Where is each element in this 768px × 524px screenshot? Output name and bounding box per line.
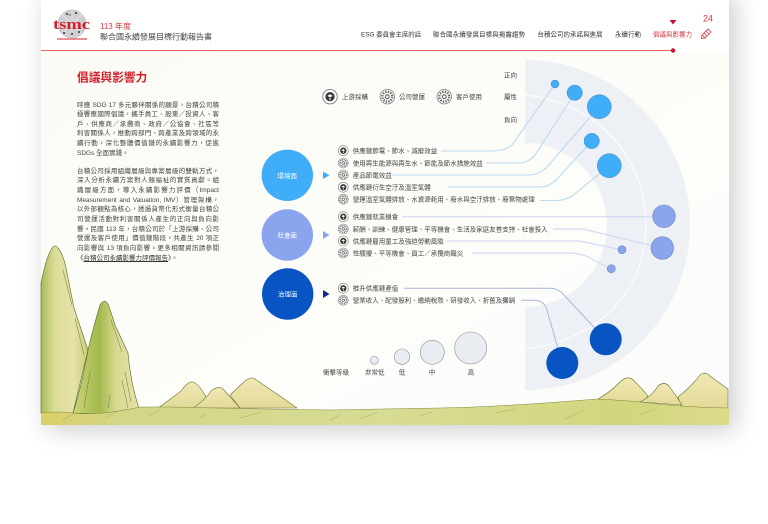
body text: 戶、供應商／承攬商、政府／公協會、社區等 [77, 121, 219, 128]
body text: 深入分析永續方案對人類福祉的實質貢獻。組 [77, 177, 219, 184]
list: environment impacts: 營運溫室氣體排放、水資源耗用、廢水與空汙排放、廢棄物處理 [353, 195, 535, 204]
list: society impacts [338, 212, 548, 258]
body text: 利害關係人，推動跨部門、跨產業及跨領域的永 [77, 130, 219, 137]
legend: impact level: 低 [399, 368, 406, 376]
axis labels: 正向 [504, 70, 517, 80]
body text: Measurement and Valuation, IMV）管理架構， [77, 197, 219, 204]
content background [41, 51, 729, 425]
list: governance impacts [338, 283, 516, 305]
list: environment impacts: 供應鏈衍生空汙及溫室氣體 [353, 183, 431, 192]
active nav marker [670, 20, 676, 24]
navigation: 台積公司的承諾與進展 [538, 30, 603, 38]
bubbles: environment [551, 80, 621, 178]
legend: impact level: 衝擊等級 [323, 368, 350, 376]
page card background [41, 0, 729, 425]
list: society impacts: 供應鏈雇用童工及強迫勞動風險 [353, 236, 444, 245]
legend: impact level: 非常低 [365, 368, 385, 376]
category: governance [262, 268, 330, 320]
value chain icons row: 公司營運 [399, 92, 426, 101]
connector lines: environment [392, 84, 609, 200]
illustration: grassy ground [41, 399, 729, 425]
logo: tsmc [53, 10, 90, 39]
report title: 聯合國永續發展目標行動報告書 [100, 32, 212, 42]
body text: 向影響與 13 項負向影響。更多相關資訊請參閱 [77, 245, 219, 252]
list: environment impacts: 使用再生能源與再生水、節能及節水措施效益 [353, 158, 483, 167]
illustration: grass strokes [62, 409, 655, 420]
bubbles: governance [546, 323, 622, 379]
body text: 台積公司採用組織層級與專案層級的雙軌方式， [77, 168, 219, 175]
connector lines: society [402, 217, 664, 269]
report title: 113 年度 [100, 21, 131, 31]
header rule [41, 48, 675, 53]
body text: 《台積公司永續影響力評價報告》。 [77, 255, 178, 262]
list: governance impacts: 推升供應鏈產值 [353, 284, 399, 293]
list: society impacts: 性騷擾、平等機會、員工／承攬商職災 [353, 248, 464, 257]
body text: 響。民國 113 年，台積公司於「上游採購、公司 [77, 226, 219, 233]
arc band [525, 60, 690, 390]
value chain icons row: 客戶使用 [456, 92, 482, 101]
navigation: 永續行動 [615, 30, 641, 38]
body text: 極響應國際倡議，攜手員工、股東／投資人、客 [77, 111, 219, 118]
axis labels: 屬性 [504, 92, 518, 101]
illustration: small mountains right [598, 373, 728, 410]
report title [100, 21, 212, 42]
illustration: tall mountains [41, 246, 139, 414]
legend: impact level [323, 332, 487, 376]
body text: 司營運活動對利害關係人產生的正向與負向影 [77, 216, 219, 223]
body text: SDGs 全面實踐。 [77, 150, 129, 157]
navigation: 倡議與影響力 [653, 30, 692, 38]
category: environment [262, 150, 330, 201]
list: society impacts: 供應鏈就業機會 [353, 212, 399, 221]
body text: 續行動，深化整體價值鏈的永續影響力，促進 [77, 140, 219, 147]
icon: pencil [702, 29, 711, 38]
illustration: small mountains left [158, 378, 297, 408]
body text [77, 101, 219, 262]
value chain icons row: 上游採購 [342, 92, 368, 101]
axis labels: 負向 [504, 115, 517, 124]
navigation [361, 30, 692, 38]
category: society [262, 209, 330, 261]
list: environment impacts: 供應鏈節電、節水、減廢效益 [353, 146, 438, 155]
bubbles: society [607, 205, 675, 273]
logo: tsmc: tsmc [53, 17, 90, 33]
body text: 呼應 SDG 17 多元夥伴關係的願景，台積公司積 [77, 102, 219, 108]
legend: impact level: 中 [429, 368, 435, 376]
value chain icons row [323, 89, 482, 104]
legend: impact level: 高 [468, 368, 475, 376]
axis labels [504, 70, 518, 124]
category: environment: 環境面 [278, 171, 298, 180]
body text: 營運及客戶使用」價值鏈階段，共產生 20 項正 [77, 235, 219, 242]
page number: 24 [703, 14, 713, 24]
connector lines: governance [404, 288, 605, 363]
list: environment impacts [338, 146, 535, 204]
list: society impacts: 薪酬、訓練、健康管理、平等機會、生活及家庭友善支持、社會投入 [353, 224, 548, 233]
category: governance: 治理面 [278, 290, 298, 298]
body text: 以外部觀點為核心，透過貨幣化形式衡量台積公 [77, 206, 219, 213]
category: society: 社會面 [278, 230, 298, 240]
navigation: ESG 委員會主席的話 [361, 30, 422, 38]
navigation: 聯合國永續發展目標與揭露趨勢 [433, 30, 526, 38]
body text: 織層級方面，導入永續影響力評價（Impact [77, 187, 219, 194]
list: governance impacts: 營業收入、配發股利、繳納稅款、研發收入、折舊及攤銷 [353, 296, 516, 305]
list: environment impacts: 產品節電效益 [353, 170, 392, 179]
heading: 倡議與影響力 [77, 70, 147, 84]
